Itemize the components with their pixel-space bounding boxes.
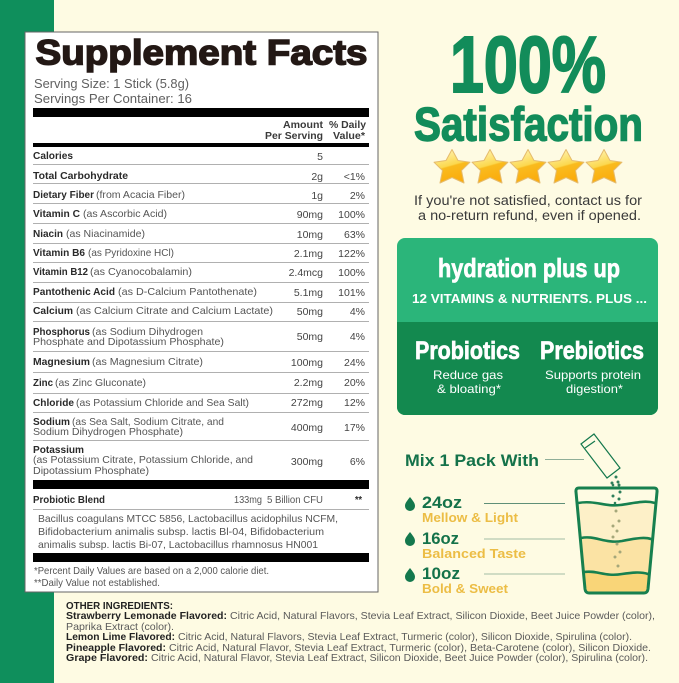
nutrient rows: (as D-Calcium Pantothenate) [118, 286, 257, 298]
other ingredients: Citric Acid, Natural Flavors, Stevia Leaf Extract, Silicon Dioxide, Beet Juice Powder (color), [230, 610, 655, 622]
nutrient rows: 6% [350, 456, 365, 468]
column: prebiotics: Supports protein [545, 368, 641, 382]
other ingredients: Citric Acid, Natural Flavors, Stevia Leaf Extract, Turmeric (color), Silicon Dioxide, Spirulina (color). [178, 631, 632, 643]
nutrient rows: Sodium [33, 416, 70, 428]
column headers: % Daily [329, 119, 366, 131]
nutrient rows: Phosphorus [33, 326, 90, 338]
column: probiotics [415, 337, 520, 396]
icon: stick pack [581, 434, 620, 478]
probiotic strains: Bifidobacterium animalis subsp. lactis Bl-04, Bifidobacterium [38, 526, 324, 538]
other ingredients: Paprika Extract (color). [66, 621, 174, 633]
nutrient rows: (as Potassium Chloride and Sea Salt) [76, 397, 249, 409]
powder falling [610, 476, 622, 568]
column: probiotics: Reduce gas [433, 368, 503, 382]
nutrient rows: Vitamin B6 [33, 247, 85, 259]
nutrient rows: (from Acacia Fiber) [96, 189, 185, 201]
column headers: Amount [283, 119, 323, 131]
nutrient rows: 10mg [297, 229, 323, 241]
nutrient rows: 101% [338, 287, 365, 299]
nutrient rows: 50mg [297, 331, 323, 343]
column: prebiotics: digestion* [566, 382, 623, 396]
nutrient rows: 2g [311, 171, 323, 183]
nutrient rows: (as Ascorbic Acid) [83, 208, 167, 220]
icon: five stars [434, 150, 622, 183]
footnotes: *Percent Daily Values are based on a 2,000 calorie diet. [34, 565, 269, 577]
nutrient rows: (as Sodium Dihydrogen [92, 326, 203, 338]
size options [405, 493, 526, 596]
column: prebiotics [540, 337, 644, 396]
probiotic strains [38, 513, 338, 551]
nutrient rows: (as Pyridoxine HCl) [88, 247, 174, 259]
other ingredients: Lemon Lime Flavored: [66, 631, 175, 643]
icon: glass with water levels [576, 476, 657, 593]
nutrient rows: 2.2mg [294, 377, 323, 389]
nutrient rows: Sodium Dihydrogen Phosphate) [33, 426, 183, 438]
guarantee text: a no-return refund, even if opened. [418, 208, 641, 223]
nutrient rows [33, 150, 365, 477]
heading: Mix 1 Pack With: Mix 1 Pack With [405, 452, 539, 470]
other ingredients: OTHER INGREDIENTS: [66, 600, 173, 612]
other ingredients: Strawberry Lemonade Flavored: [66, 610, 227, 622]
guarantee text [414, 193, 643, 223]
nutrient rows: Chloride [33, 397, 74, 409]
column: prebiotics: Prebiotics [540, 337, 644, 365]
nutrient rows: Calcium [33, 305, 73, 317]
nutrient rows: 5 [317, 151, 323, 163]
green side strip [0, 0, 54, 683]
heading: Supplement Facts: Supplement Facts [36, 34, 368, 72]
nutrient rows: Vitamin C [33, 208, 80, 220]
option: 10oz: Bold & Sweet [422, 582, 509, 596]
option: 16oz: 16oz [422, 529, 459, 548]
nutrient rows: Zinc [33, 377, 53, 389]
nutrient rows: Dipotassium Phosphate) [33, 465, 149, 477]
column: probiotics: Probiotics [415, 337, 520, 365]
column: probiotics: & bloating* [437, 382, 501, 396]
other ingredients: Citric Acid, Natural Flavor, Stevia Leaf Extract, Turmeric (color), Beta-Carotene (color), Silicon Dioxide. [169, 642, 651, 654]
guarantee text: If you're not satisfied, contact us for [414, 193, 643, 208]
nutrient rows: 2.1mg [294, 248, 323, 260]
nutrient rows: Dietary Fiber [33, 189, 94, 201]
nutrient rows: Niacin [33, 228, 63, 240]
footnotes [34, 565, 269, 589]
nutrient rows: 4% [350, 331, 365, 343]
nutrient rows: 1g [311, 190, 323, 202]
nutrient rows: 100mg [291, 357, 323, 369]
panel subheading: 12 VITAMINS & NUTRIENTS. PLUS ... [412, 292, 647, 306]
nutrient rows: 90mg [297, 209, 323, 221]
nutrient rows: 24% [344, 357, 365, 369]
nutrient rows: 17% [344, 422, 365, 434]
serving information: Servings Per Container: 16 [34, 91, 192, 106]
nutrient rows: (as Calcium Citrate and Calcium Lactate) [76, 305, 273, 317]
nutrient rows: 400mg [291, 422, 323, 434]
nutrient rows: (as Sea Salt, Sodium Citrate, and [72, 416, 224, 428]
nutrient rows: Calories [33, 150, 73, 162]
nutrient rows: 20% [344, 377, 365, 389]
nutrient rows: 300mg [291, 456, 323, 468]
other ingredients: Citric Acid, Natural Flavor, Stevia Leaf Extract, Silicon Dioxide, Beet Juice Powder (color), Spirulina (color). [151, 652, 648, 664]
option: 24oz [405, 493, 519, 525]
other ingredients: Grape Flavored: [66, 652, 148, 664]
nutrient rows: (as Magnesium Citrate) [92, 356, 203, 368]
nutrient rows: 100% [338, 267, 365, 279]
panel: supplement facts [25, 32, 378, 592]
option: 24oz: Mellow & Light [422, 511, 519, 525]
serving information [34, 76, 192, 106]
nutrient rows: Total Carbohydrate [33, 170, 128, 182]
nutrient rows: Magnesium [33, 356, 90, 368]
nutrient rows: 4% [350, 306, 365, 318]
nutrient rows: 272mg [291, 397, 323, 409]
other ingredients: Pineapple Flavored: [66, 642, 166, 654]
heading: 100%: 100% [450, 20, 606, 109]
column headers: Per Serving [265, 130, 323, 142]
nutrient rows: 2.4mcg [289, 267, 323, 279]
option: 16oz: Balanced Taste [422, 547, 526, 561]
nutrient rows: 50mg [297, 306, 323, 318]
probiotic blend row: Probiotic Blend [33, 494, 105, 506]
nutrient rows: 122% [338, 248, 365, 260]
other ingredients [66, 600, 655, 664]
probiotic blend row [33, 494, 363, 506]
nutrient rows: 5.1mg [294, 287, 323, 299]
column headers [265, 119, 366, 142]
nutrient rows: (as Niacinamide) [66, 228, 145, 240]
option: 24oz: 24oz [422, 493, 462, 512]
panel: hydration plus up [397, 238, 658, 415]
nutrient rows: 100% [338, 209, 365, 221]
nutrient rows: (as Cyanocobalamin) [90, 266, 192, 278]
option: 16oz [405, 529, 526, 561]
option: 10oz [405, 564, 509, 596]
nutrient rows: 12% [344, 397, 365, 409]
probiotic strains: Bacillus coagulans MTCC 5856, Lactobacillus acidophilus NCFM, [38, 513, 338, 525]
serving information: Serving Size: 1 Stick (5.8g) [34, 76, 189, 91]
probiotic blend row: 133mg [234, 494, 262, 506]
nutrient rows: Potassium [33, 444, 84, 456]
nutrient rows: Pantothenic Acid [33, 286, 115, 298]
probiotic strains: animalis subsp. lactis Bi-07, Lactobacillus rhamnosus HN001 [38, 539, 318, 551]
probiotic blend row: ** [355, 494, 363, 506]
footnotes: **Daily Value not established. [34, 577, 160, 589]
nutrient rows: 63% [344, 229, 365, 241]
heading: Satisfaction: Satisfaction [414, 98, 643, 150]
nutrient rows: Vitamin B12 [33, 266, 88, 278]
nutrient rows: (as Potassium Citrate, Potassium Chloride, and [33, 454, 253, 466]
option: 10oz: 10oz [422, 564, 460, 583]
nutrient rows: <1% [344, 171, 365, 183]
nutrient rows: Phosphate and Dipotassium Phosphate) [33, 336, 224, 348]
nutrient rows: 2% [350, 190, 365, 202]
nutrient rows: (as Zinc Gluconate) [55, 377, 146, 389]
column headers: Value* [333, 130, 366, 142]
panel heading: hydration plus up [438, 253, 620, 283]
probiotic blend row: 5 Billion CFU [267, 494, 323, 506]
